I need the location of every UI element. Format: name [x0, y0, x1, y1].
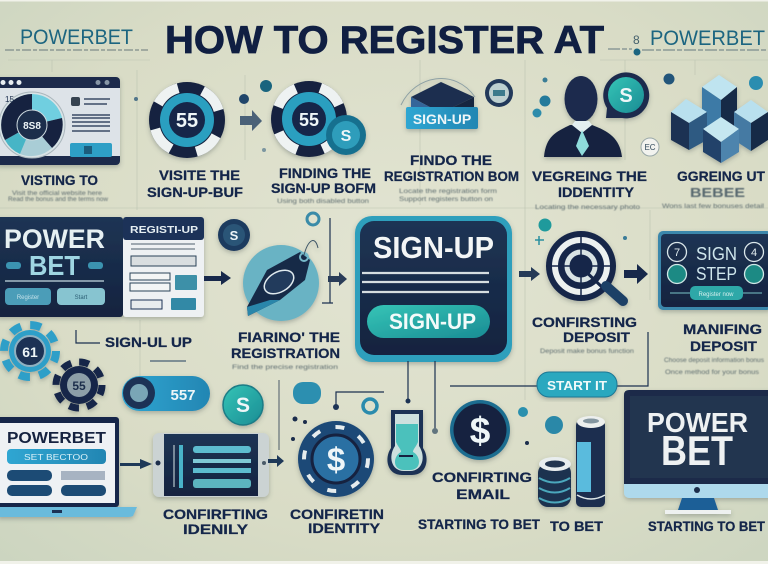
icon: cylinder	[576, 416, 605, 507]
label: finding the registration: FIARINO' THE	[238, 329, 340, 345]
label: confirming email	[432, 469, 532, 502]
icon: poker chip 2 with coin	[267, 77, 366, 161]
icon: gear teal	[4, 325, 56, 377]
phone bars	[174, 445, 251, 488]
icon: gear navy: 55	[72, 379, 86, 393]
label: sign-up: SIGN-UL UP	[105, 334, 192, 350]
label: confirming identity 1: CONFIRFTING	[163, 506, 268, 522]
label: find the registration: Locate the registration form	[399, 189, 497, 195]
button: SIGN-UP	[389, 309, 476, 334]
icon: dollar chip	[298, 421, 374, 497]
icon: round badge	[485, 79, 513, 107]
connector lines	[322, 218, 333, 303]
icon: small floating dots	[518, 407, 563, 445]
label: finding the sign-up: SIGN-UP BOFM	[271, 180, 376, 196]
label: visit the sign-up	[147, 167, 243, 200]
panel: monitor	[624, 390, 768, 514]
label: manifing deposit: DEPOSIT	[690, 338, 757, 354]
label: confirming email: CONFIRTING	[432, 469, 532, 485]
form fields: REGISTI-UP	[130, 225, 198, 236]
label: visiting to: Visit the official website here	[12, 191, 103, 197]
panel: sign step card: Register now	[698, 292, 734, 298]
laptop buttons: SET BECTOO	[24, 453, 88, 462]
donut chart: 8S8	[23, 121, 41, 132]
label: find the registration: REGISTRATION BOM	[384, 169, 519, 184]
decorative dots: dollar chip	[291, 416, 307, 441]
button: start it: START IT	[547, 378, 607, 393]
icon: small dots	[134, 80, 272, 152]
arrow	[204, 271, 231, 285]
label: visiting to: Read the bonus and the terms now	[8, 197, 109, 203]
label: visit the sign-up: SIGN-UP-BUF	[147, 184, 243, 200]
button: start it	[537, 372, 617, 397]
icon: speech bubble S: S	[619, 85, 633, 107]
icon: target with magnifier	[546, 231, 623, 301]
label: finding the registration	[231, 329, 340, 371]
icon: hourglass vial	[387, 410, 427, 475]
buttons: Register	[17, 295, 39, 301]
logo: Powerbet right	[608, 27, 768, 56]
connector line	[278, 380, 280, 450]
pill: 557	[122, 376, 210, 411]
icon: S coin: S	[230, 228, 239, 243]
label: getting up: Wons last few bonuses detail	[662, 204, 764, 210]
label: finding the sign-up: Using both disabled button	[277, 199, 369, 205]
label: verifying the identity: IDDENTITY	[558, 184, 635, 200]
form fields	[130, 225, 198, 310]
heading: SIGN-UP	[373, 230, 494, 265]
panel: powerbet registration form: POWER	[4, 224, 105, 254]
panel: visiting browser window: 15	[5, 95, 14, 104]
label: starting to bet right: STARTING TO BET	[648, 519, 766, 534]
label: visiting to: VISTING TO	[21, 173, 98, 188]
icon: graduation cap sign-up badge: SIGN-UP	[413, 111, 471, 127]
label: getting up: BEBEE	[690, 185, 745, 200]
label: manifing deposit: Choose deposit information bonus	[664, 358, 764, 364]
label: confirming identity 2: CONFIRETIN	[290, 506, 384, 522]
arrow	[240, 110, 262, 131]
arrow	[268, 455, 284, 467]
panel: powerbet registration form: BET	[29, 250, 80, 281]
label: confirming deposit: Deposit make bonus function	[540, 349, 634, 355]
buttons: Start	[75, 295, 88, 301]
label: verifying the identity: VEGREING THE	[532, 168, 647, 184]
icon: gear navy	[56, 362, 102, 408]
label: visit the sign-up: VISITE THE	[159, 167, 240, 183]
laptop heading: POWERBET	[7, 430, 106, 447]
label: confirming identity 2	[290, 506, 384, 536]
icon: poker chip 2 with coin: S	[341, 128, 352, 145]
icon: top small ring	[307, 213, 319, 225]
arrow	[120, 459, 152, 469]
profile text lines	[71, 97, 110, 131]
panel: sign step card	[658, 231, 768, 310]
title: HOW TO REGISTER AT	[165, 19, 604, 62]
icon: small dots	[532, 78, 659, 156]
icon: poker chip 2 with coin: 55	[299, 110, 319, 130]
logo: Powerbet left: POWERBET	[20, 26, 133, 49]
panel: main sign-up card	[355, 216, 512, 362]
icon: gear teal: 61	[22, 344, 38, 360]
icon: coin stack	[538, 457, 571, 507]
label: sign-up	[76, 330, 192, 361]
pill: 557: 557	[170, 387, 196, 404]
label: confirming deposit: DEPOSIT	[563, 329, 630, 345]
label: find the registration: FINDO THE	[410, 152, 492, 168]
panel: sign step card: STEP	[696, 264, 737, 284]
label: getting up	[662, 168, 765, 210]
panel: monitor: BET	[661, 427, 733, 474]
panel: powerbet registration form	[0, 217, 204, 317]
label: finding the registration: REGISTRATION	[231, 345, 340, 361]
label: verifying the identity	[532, 168, 647, 211]
step icons: 4	[751, 247, 757, 259]
label: confirming identity 2: IDENTITY	[308, 520, 381, 536]
label: visiting to	[8, 173, 109, 203]
icon: graduation cap sign-up badge	[401, 79, 478, 129]
logo: Powerbet right: 8	[633, 33, 640, 47]
connector lines	[406, 332, 648, 434]
icon: corner dots	[664, 74, 763, 90]
label: to bet: TO BET	[550, 518, 603, 534]
heading: SIGN	[696, 244, 737, 264]
arrow	[519, 267, 540, 281]
icon: dollar coin: $	[470, 410, 491, 451]
logo: Powerbet right: POWERBET	[650, 27, 765, 50]
icon: phone	[153, 433, 269, 497]
icon: S teal coin: S	[236, 394, 250, 417]
label: getting up: GGREING UT	[677, 168, 765, 184]
panel: visiting browser window	[0, 77, 120, 165]
icon: dollar chip: $	[327, 441, 345, 478]
icon: tag on teal circle	[243, 241, 319, 321]
icon: small connector node	[293, 382, 384, 413]
arrow	[328, 272, 347, 286]
label: confirming identity 1: IDENILY	[183, 521, 249, 537]
icon: speech bubble S	[603, 72, 649, 118]
label: starting to bet: STARTING TO BET	[418, 517, 541, 532]
label: confirming deposit: CONFIRSTING	[532, 314, 637, 330]
arrow	[624, 264, 648, 284]
buttons	[5, 288, 105, 305]
icon: S coin	[218, 219, 250, 251]
label: find the registration	[384, 152, 519, 203]
icon: poker chip 1	[142, 75, 232, 165]
button	[367, 305, 490, 338]
label: manifing deposit	[664, 321, 764, 376]
icon: S teal coin	[223, 385, 263, 425]
icon: stacked cubes	[671, 75, 768, 163]
label: find the registration: Support registers button on	[399, 197, 493, 203]
label: manifing deposit: Once method for your bonus	[665, 370, 759, 376]
step icons: 7	[674, 247, 680, 259]
monitor text: POWER	[647, 407, 748, 438]
icon: person with tie	[544, 76, 622, 157]
label: finding the sign-up: FINDING THE	[279, 165, 371, 181]
laptop buttons	[7, 449, 106, 496]
label: confirming email: EMAIL	[456, 486, 511, 502]
panel: powerbet laptop	[0, 417, 137, 517]
icon: poker chip 1: 55	[176, 110, 198, 132]
icon: dollar coin	[450, 400, 510, 460]
step icons	[668, 242, 764, 284]
label: finding the registration: Find the precise registration	[232, 365, 338, 371]
label: confirming identity 1	[163, 506, 268, 537]
label: verifying the identity: Locating the necessary photo	[535, 205, 641, 211]
label: confirming deposit	[532, 314, 637, 355]
icon: small dots: EC	[644, 143, 656, 152]
label: manifing deposit: MANIFING	[683, 321, 762, 337]
label: finding the sign-up	[271, 165, 376, 205]
icon: teal dot	[535, 218, 627, 245]
